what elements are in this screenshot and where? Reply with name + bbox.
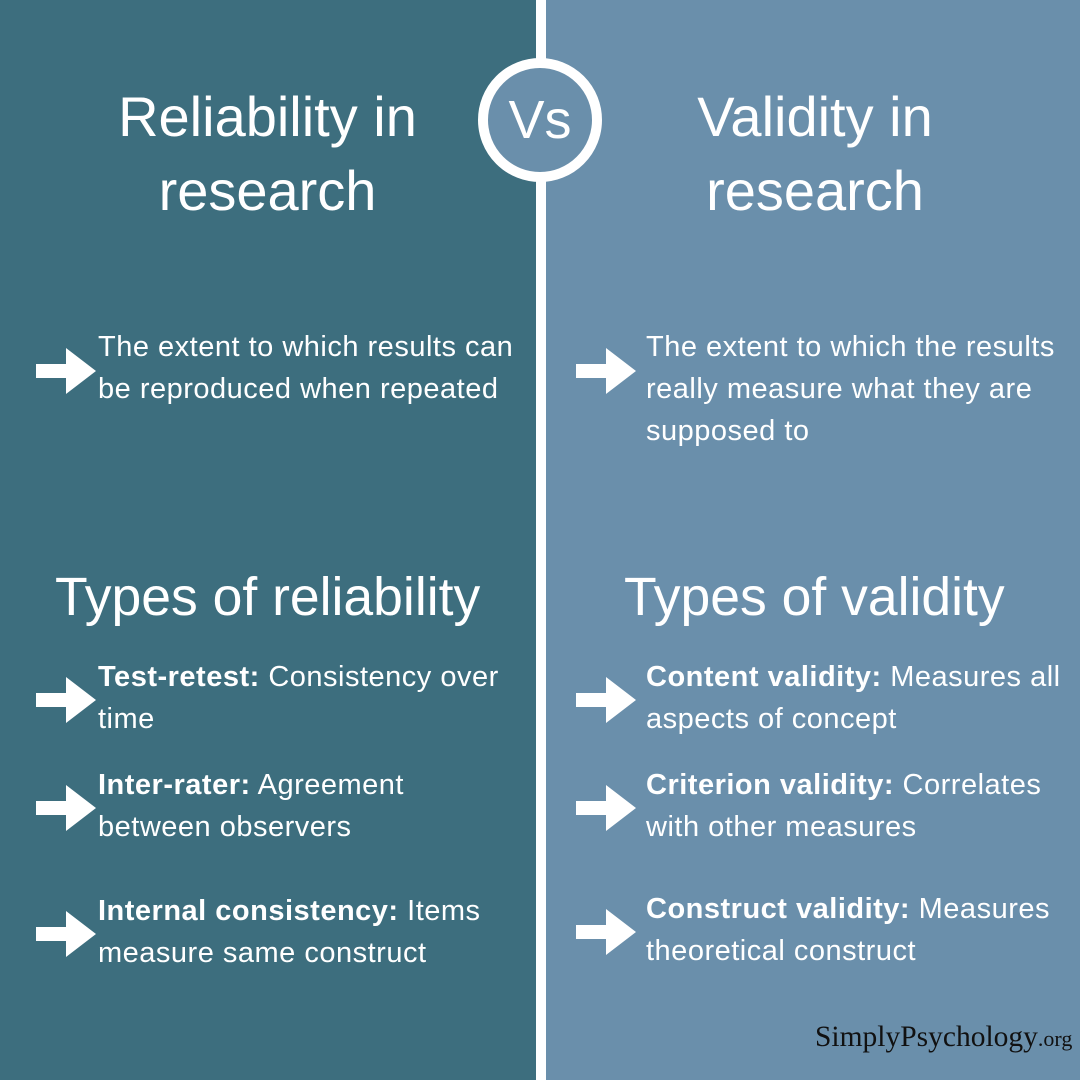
item: criterion validity: Criterion validity: Correlates (646, 769, 1041, 801)
item: test-retest: time (98, 703, 155, 735)
item: content validity: Content validity: Measures all (646, 661, 1061, 693)
item: inter-rater: Inter-rater: Agreement (98, 769, 404, 801)
definition: validity: supposed to (646, 415, 810, 447)
definition: validity: The extent to which the results (646, 331, 1055, 363)
arrow icon (36, 348, 96, 394)
item: construct validity (576, 893, 1050, 967)
vs circle (478, 58, 602, 182)
heading: types of validity: Types of validity (624, 568, 1005, 627)
footer brand: SimplyPsychology.org (815, 1021, 1072, 1053)
item: inter-rater: between observers (98, 811, 352, 843)
title: reliability: Reliability in (118, 85, 417, 148)
item: criterion validity (576, 769, 1041, 843)
title: validity: research (706, 159, 924, 222)
title: reliability (118, 85, 417, 222)
item: test-retest: Test-retest: Consistency over (98, 661, 499, 693)
definition: reliability (36, 331, 513, 405)
item: content validity (576, 661, 1061, 735)
definition: validity (576, 331, 1055, 447)
title: validity (697, 85, 933, 222)
title: validity: Validity in (697, 85, 933, 148)
item: construct validity: Construct validity: Measures (646, 893, 1050, 925)
item: criterion validity: with other measures (646, 811, 917, 843)
item: content validity: aspects of concept (646, 703, 897, 735)
definition: reliability: be reproduced when repeated (98, 373, 498, 405)
definition: reliability: The extent to which results can (98, 331, 513, 363)
heading: types of reliability: Types of reliability (55, 568, 480, 627)
item: internal consistency (36, 895, 481, 969)
definition: validity: really measure what they are (646, 373, 1032, 405)
item: internal consistency: measure same construct (98, 937, 427, 969)
item: internal consistency: Internal consistency: Items (98, 895, 481, 927)
arrow icon (576, 348, 636, 394)
item: construct validity: theoretical construct (646, 935, 916, 967)
item: inter-rater (36, 769, 404, 843)
item: test-retest (36, 661, 499, 735)
title: reliability: research (159, 159, 376, 222)
vs circle: Vs (508, 90, 572, 150)
